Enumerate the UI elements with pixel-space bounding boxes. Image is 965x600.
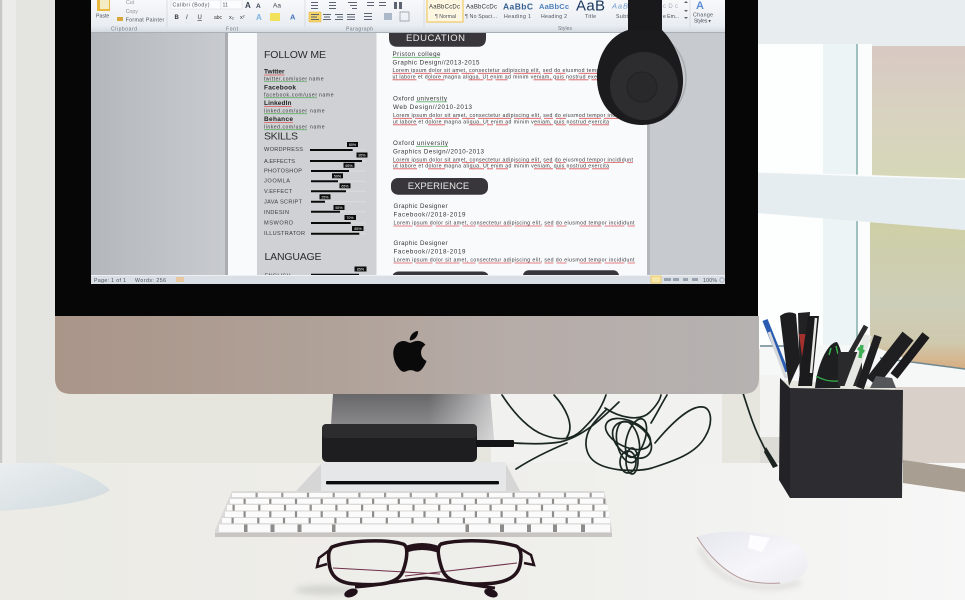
behance link: linked.com/user — [264, 125, 307, 131]
experience heading pill — [391, 178, 488, 195]
status bar: Page: 1 of 1 — [94, 278, 126, 284]
monitor stand — [330, 394, 494, 440]
status bar: 100% — [703, 278, 717, 284]
font group: x₂ — [229, 15, 234, 21]
facebook link — [264, 84, 334, 99]
linkedin link: linked.com/user — [264, 109, 307, 115]
font group: A — [290, 12, 296, 22]
cables — [502, 393, 778, 474]
styles gallery: AaBbCcDc — [429, 4, 460, 10]
sidebar: follow me — [264, 49, 334, 131]
styles gallery: AaBbCcDc — [466, 4, 497, 10]
external hard drive — [322, 424, 514, 462]
experience entry 1: Facebook//2018-2019 — [394, 211, 466, 218]
styles gallery: AaBbCc — [539, 2, 569, 11]
experience entry 1: Graphic Designer — [394, 203, 448, 210]
sidebar: skills chart: JAVA SCRIPT — [264, 200, 303, 206]
behance link: name — [310, 125, 325, 131]
education entry 2: Oxford university — [393, 96, 448, 102]
linkedin link: LinkedIn — [264, 100, 292, 107]
sidebar: skills chart: ILLUSTRATOR — [264, 231, 305, 237]
skill value tags: 70% — [346, 216, 354, 220]
holder box — [779, 378, 903, 498]
font group: A — [256, 13, 262, 22]
word processor window background — [91, 0, 725, 284]
clipboard group: Paste — [96, 14, 109, 20]
behance link: Behance — [264, 116, 293, 123]
clipboard group: Cut — [126, 0, 135, 6]
education entry 3 — [393, 140, 634, 170]
sidebar: skills chart — [264, 130, 368, 237]
styles gallery: AaBbC — [503, 2, 533, 12]
icon: apple logo — [393, 331, 427, 372]
skill value tags: 85% — [354, 227, 362, 231]
education entry 1: Priston college — [392, 51, 441, 58]
sidebar: skills chart: PHOTOSHOP — [264, 169, 302, 175]
font group: A — [245, 1, 251, 10]
sidebar: language: 85% — [357, 268, 365, 272]
linkedin link: name — [310, 109, 325, 115]
key rows — [219, 495, 610, 532]
font group: B — [174, 15, 180, 21]
skill value tags: 65% — [345, 164, 353, 168]
clipboard group: Format Painter — [126, 18, 164, 24]
experience heading pill: EXPERIENCE — [408, 181, 469, 192]
sidebar: follow me: FOLLOW ME — [264, 49, 326, 61]
styles gallery: A — [696, 0, 704, 12]
optical drive on stand base — [296, 462, 520, 491]
clipboard group: Clipboard — [111, 26, 137, 32]
word ribbon toolbar — [91, 0, 725, 33]
facebook link: name — [319, 93, 334, 99]
twitter link — [264, 68, 324, 82]
sidebar: skills chart: WORDPRESS — [264, 147, 303, 153]
font group: x² — [240, 15, 245, 21]
experience entry 1: Lorem ipsum dolor sit amet, consectetur adipiscing elit, sed do eiusmod tempor incididunt — [394, 221, 635, 227]
twitter link: Twitter — [264, 68, 285, 76]
status bar — [91, 275, 725, 284]
section: experience — [391, 178, 635, 282]
behance link — [264, 116, 325, 131]
twitter link: twitter.com/user — [264, 76, 307, 82]
experience entry 1 — [394, 203, 635, 227]
experience entry 2 — [394, 240, 635, 264]
education entry 1: Lorem ipsum dolor sit amet, consectetur adipiscing elit, sed do eiusmod tempor incididunt — [392, 68, 633, 74]
resume sidebar — [257, 33, 376, 276]
mouse — [697, 532, 808, 587]
paragraph group — [309, 2, 409, 32]
font group — [171, 0, 296, 32]
education entry 2: ut labore et dolore magna aliqua. Ut enim ad minim veniam, quis nostrud exercita — [393, 120, 609, 126]
skill value tags: 25% — [321, 195, 329, 199]
linkedin link — [264, 100, 325, 115]
pen holder with pens — [765, 312, 926, 498]
twitter link: name — [309, 76, 324, 82]
section: education — [389, 30, 634, 170]
sidebar: skills chart: SKILLS — [264, 130, 298, 142]
sidebar: skills chart: A.EFFECTS — [264, 159, 295, 165]
skill value tags: 50% — [334, 174, 342, 178]
window panes — [870, 46, 965, 369]
window on the right — [755, 0, 965, 492]
education entry 3: Graphics Design//2010-2013 — [393, 149, 485, 156]
font group: Calibri (Body) — [172, 2, 210, 8]
keyboard — [215, 491, 612, 537]
styles gallery: Change — [693, 12, 713, 18]
sidebar: skills chart: INDESIN — [264, 210, 289, 216]
lamp at left — [0, 0, 110, 511]
styles gallery: Heading 1 — [504, 14, 531, 20]
skill value tags: 95% — [358, 154, 366, 158]
monitor screen bezel — [55, 0, 758, 316]
skill value tags: 65% — [341, 184, 349, 188]
education entry 1: ut labore et dolore magna aliqua. Ut enim ad minim veniam, quis nostrud exercita — [392, 74, 609, 80]
headphones — [597, 0, 686, 125]
styles gallery: Styles ▾ — [694, 18, 711, 24]
font group: abc — [214, 15, 223, 21]
facebook link: Facebook — [264, 84, 296, 92]
document page — [225, 33, 650, 276]
styles gallery: cDc — [663, 4, 678, 10]
clipboard group: Copy — [126, 9, 138, 15]
sidebar: skills chart: MSWORD — [264, 221, 293, 227]
font group: 11 — [222, 2, 228, 8]
sidebar: language: ENGLISH — [264, 274, 290, 280]
experience entry 2: Graphic Designer — [394, 240, 448, 247]
clipboard group — [96, 0, 164, 32]
skill value tags — [320, 142, 368, 231]
font group: U — [198, 15, 202, 21]
sidebar: skills chart: JOOMLA — [264, 179, 290, 185]
skill value tags: 80% — [349, 143, 357, 147]
styles gallery: AaB — [611, 2, 628, 10]
styles gallery: ¶ Normal — [435, 14, 456, 20]
font group: Aa — [273, 2, 281, 10]
education entry 2: Web Design//2010-2013 — [393, 104, 473, 111]
next section pills, cut off by status bar — [392, 270, 619, 282]
education entry 3: Lorem ipsum dolor sit amet, consectetur adipiscing elit, sed do eiusmod tempor incididunt — [393, 157, 634, 163]
experience entry 2: Lorem ipsum dolor sit amet, consectetur adipiscing elit, sed do eiusmod tempor incididunt — [394, 258, 635, 264]
sidebar: language: LANGUAGE — [264, 251, 322, 263]
styles gallery: e Em... — [663, 14, 679, 20]
monitor chin — [55, 316, 759, 394]
skill value tags: 55% — [335, 206, 343, 210]
glasses — [295, 541, 534, 599]
word processor screen content — [91, 0, 725, 284]
education entry 3: ut labore et dolore magna aliqua. Ut enim ad minim veniam, quis nostrud exercita — [393, 164, 609, 170]
education entry 1 — [392, 51, 633, 80]
education entry 3: Oxford university — [393, 140, 449, 147]
styles gallery — [427, 0, 713, 32]
font group: I — [186, 15, 188, 21]
status bar: Words: 256 — [135, 278, 166, 284]
styles gallery: Styles — [558, 26, 572, 32]
facebook link: facebook.com/user — [264, 93, 317, 99]
styles gallery: Subt — [616, 14, 629, 20]
wall under the sill — [760, 375, 965, 492]
cable panel behind the stand — [491, 394, 722, 463]
education entry 2: Lorem ipsum dolor sit amet, consectetur adipiscing elit, sed do eiusmod tempor incididunt — [393, 113, 634, 119]
education entry 2 — [393, 96, 634, 126]
education heading pill: EDUCATION — [406, 33, 465, 44]
font group: Font — [226, 26, 239, 32]
education heading pill — [389, 30, 486, 47]
pens — [765, 312, 926, 388]
styles gallery: Heading 2 — [541, 14, 567, 20]
education entry 1: Graphic Design//2013-2015 — [392, 60, 480, 66]
styles gallery: ¶ No Spaci... — [465, 14, 497, 20]
sidebar: skills chart: V.EFFECT — [264, 189, 293, 195]
experience entry 2: Facebook//2018-2019 — [394, 248, 466, 255]
styles gallery: Title — [585, 14, 596, 20]
font group: A — [256, 3, 261, 10]
paragraph group: Paragraph — [346, 26, 373, 32]
sidebar: language — [264, 251, 366, 280]
